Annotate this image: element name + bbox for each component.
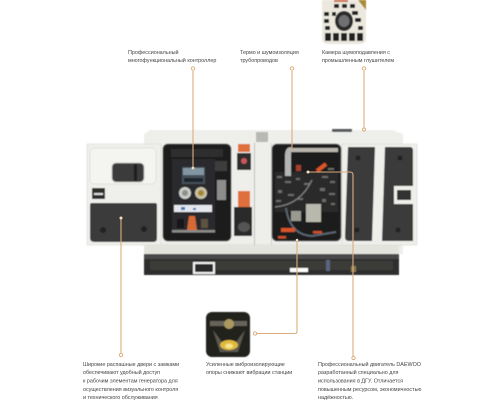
text: muffler chamber: промышленным глушителем [322, 58, 394, 64]
sockets [179, 187, 191, 199]
left door [87, 144, 161, 245]
engine cabinet [272, 144, 341, 241]
text: vibration mounts: Усиленные виброизолирующие [206, 362, 285, 368]
door panel [90, 203, 157, 242]
callout line: vibration mounts [253, 239, 298, 335]
orange breaker [187, 216, 197, 230]
callout line: muffler [362, 67, 366, 131]
middle switches [234, 144, 252, 236]
text: engine: Профессиональный двигатель DAEWOO [318, 361, 421, 368]
callout line: engine [306, 170, 355, 360]
control cabinet [163, 144, 231, 241]
text: muffler chamber: Камера шумоподавления с [322, 50, 390, 56]
callout line: pipe insulation [290, 67, 294, 150]
text: controller: Профессиональный [128, 49, 178, 56]
text: doors: Широкие распашные двери с замками [83, 362, 179, 368]
controller screen [182, 167, 205, 184]
text: pipe insulation: трубопроводов [240, 58, 278, 64]
callout line: controller [191, 67, 195, 169]
text: doors [83, 362, 179, 400]
breaker strip [174, 205, 212, 212]
text: engine: повышенным ресурсом, экономичностью [318, 387, 421, 393]
text: doors: осуществления визуального контроля [83, 387, 178, 393]
generator illustration [87, 129, 417, 275]
text: vibration mounts: опоры снижают вибрации станции [206, 370, 292, 376]
right door [342, 144, 417, 245]
text: engine [318, 361, 421, 400]
text: controller: многофункциональный контроллер [128, 57, 216, 64]
text: engine: разработанный специально для [318, 369, 399, 376]
text: pipe insulation [240, 50, 299, 64]
text: doors: к рабочим элементам генератора для [83, 378, 178, 384]
generator base [144, 254, 399, 275]
text: vibration mounts [206, 362, 292, 376]
callout line: doors [119, 216, 123, 357]
text: doors: обеспечивают удобный доступ [83, 369, 160, 376]
door window [112, 163, 144, 182]
generator body [144, 129, 403, 254]
text: controller [128, 49, 216, 64]
icon: vibration mount photo [206, 312, 250, 357]
text: engine: использования в ДГУ. Отличается [318, 378, 403, 384]
text: pipe insulation: Термо и шумоизоляция [240, 50, 299, 56]
text: muffler chamber [322, 50, 394, 64]
icon: muffler chamber photo [322, 0, 366, 44]
